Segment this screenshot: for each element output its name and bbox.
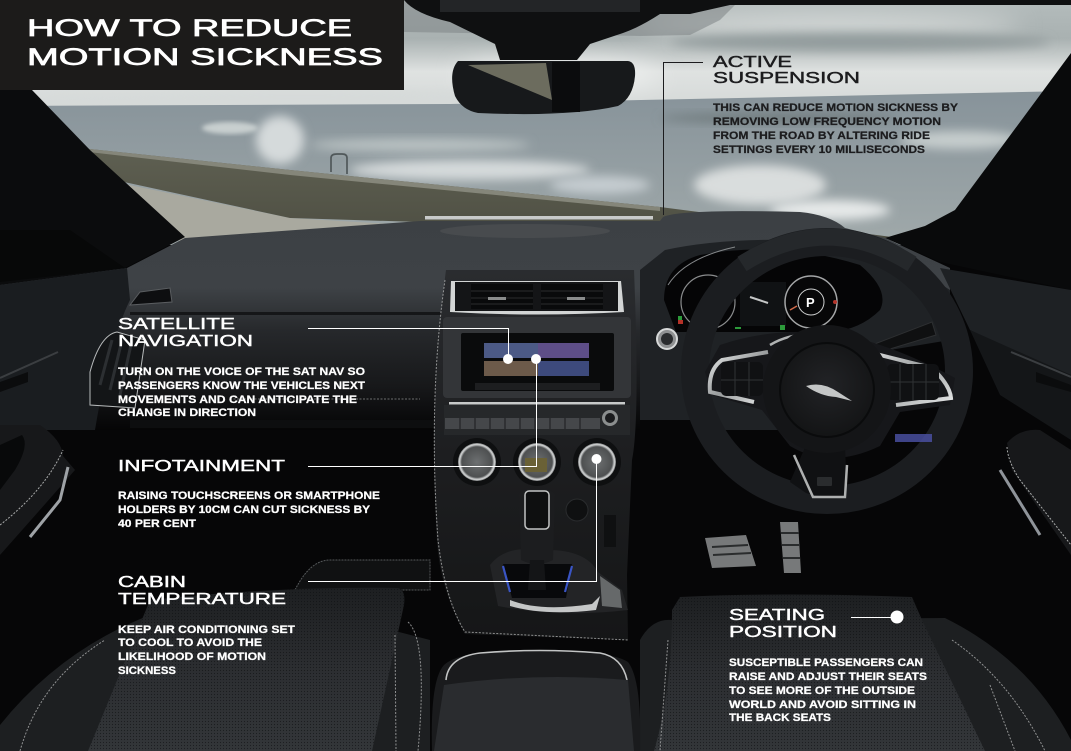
callout: satellite navigation: CHANGE IN DIRECTION <box>118 407 256 419</box>
photo: left side vent <box>90 332 145 408</box>
icon: left spoke controls <box>710 334 818 402</box>
connector: cabin temperature <box>308 454 602 582</box>
photo: cluster gauge gear letter: P <box>806 295 815 310</box>
callout: active suspension: ACTIVE <box>713 54 792 71</box>
icon: start button <box>657 329 677 349</box>
callout: seating position: TO SEE MORE OF THE OUTSIDE <box>729 685 915 697</box>
photo: blue steering column lights <box>895 434 932 442</box>
callout: cabin temperature <box>118 574 295 677</box>
callout: active suspension: FROM THE ROAD BY ALTERING RIDE <box>713 130 930 142</box>
photo: dashboard <box>0 211 950 430</box>
connector: seating position <box>851 610 904 624</box>
photo: crashing waves <box>202 113 1020 220</box>
callout: satellite navigation <box>118 316 365 419</box>
photo: gear selector <box>490 488 628 613</box>
callout: seating position: WORLD AND AVOID SITTING IN <box>729 699 916 711</box>
icon: right spoke controls <box>860 350 951 405</box>
photo: pedals <box>705 522 801 573</box>
connector: infotainment <box>308 354 541 466</box>
callout: active suspension: THIS CAN REDUCE MOTION SICKNESS BY <box>713 102 959 114</box>
photo: floor mat <box>295 560 430 590</box>
callout: infotainment: RAISING TOUCHSCREENS OR SMARTPHONE <box>118 490 380 502</box>
callout: active suspension: SUSPENSION <box>713 70 860 87</box>
photo: sea view through windscreen <box>0 0 1071 245</box>
callout: cabin temperature: SICKNESS <box>118 665 176 677</box>
photo: cluster <box>640 240 950 430</box>
callout: cabin temperature: LIKELIHOOD OF MOTION <box>118 651 266 663</box>
callout: seating position: RAISE AND ADJUST THEIR SEATS <box>729 671 927 683</box>
icon: steering wheel <box>695 237 959 500</box>
photo: left pillar <box>0 85 185 285</box>
connector: satellite navigation <box>308 328 513 364</box>
icon: small dash vent <box>130 288 172 305</box>
callout: satellite navigation: TURN ON THE VOICE OF THE SAT NAV SO <box>118 366 365 378</box>
photo: center console <box>434 270 637 640</box>
callout: cabin temperature: CABIN <box>118 574 186 591</box>
title box: MOTION SICKNESS <box>27 44 383 71</box>
photo: sea wall <box>80 148 900 245</box>
callout: cabin temperature: TEMPERATURE <box>118 591 286 608</box>
photo: passenger seat <box>0 588 430 751</box>
callout: satellite navigation: SATELLITE <box>118 316 235 333</box>
photo: seats <box>0 588 1071 751</box>
photo: 12V socket <box>566 499 588 521</box>
callout: satellite navigation: MOVEMENTS AND CAN ANTICIPATE THE <box>118 394 357 406</box>
photo: headliner and mirror mount <box>404 0 1071 60</box>
callout: seating position <box>729 607 927 724</box>
photo: right pillar <box>885 53 1071 290</box>
callout: active suspension: REMOVING LOW FREQUENCY MOTION <box>713 116 941 128</box>
callout: seating position: SEATING <box>729 607 825 624</box>
photo: touchscreen <box>443 317 631 398</box>
callout: cabin temperature: KEEP AIR CONDITIONING SET <box>118 624 295 636</box>
callout: seating position: POSITION <box>729 624 837 641</box>
title box <box>0 0 404 90</box>
connector: active suspension <box>664 62 703 215</box>
callout: seating position: SUSCEPTIBLE PASSENGERS CAN <box>729 657 923 669</box>
icon: jaguar badge <box>806 384 852 401</box>
photo: driver seat <box>640 594 1071 751</box>
photo: climate dials <box>453 438 621 486</box>
title box: HOW TO REDUCE <box>27 15 352 42</box>
photo: chrome trim and buttons <box>444 402 630 435</box>
icon: wiper stalk <box>872 322 936 352</box>
photo: right door <box>940 268 1071 555</box>
callout: infotainment: 40 PER CENT <box>118 518 196 530</box>
callout: infotainment <box>118 458 380 530</box>
callout: active suspension <box>713 54 959 156</box>
icon: rear-view mirror <box>452 61 635 114</box>
callout: satellite navigation: PASSENGERS KNOW THE VEHICLES NEXT <box>118 380 365 392</box>
callout: infotainment: INFOTAINMENT <box>118 458 285 475</box>
photo: air vents <box>450 281 624 314</box>
photo: centre armrest <box>432 650 640 751</box>
callout: satellite navigation: NAVIGATION <box>118 333 253 350</box>
callout: active suspension: SETTINGS EVERY 10 MILLISECONDS <box>713 144 925 156</box>
callout: infotainment: HOLDERS BY 10CM CAN CUT SICKNESS BY <box>118 504 371 516</box>
callout: cabin temperature: TO COOL TO AVOID THE <box>118 637 262 649</box>
photo: dash stitching <box>230 398 420 400</box>
photo: left door <box>0 352 75 555</box>
callout: seating position: THE BACK SEATS <box>729 712 831 724</box>
